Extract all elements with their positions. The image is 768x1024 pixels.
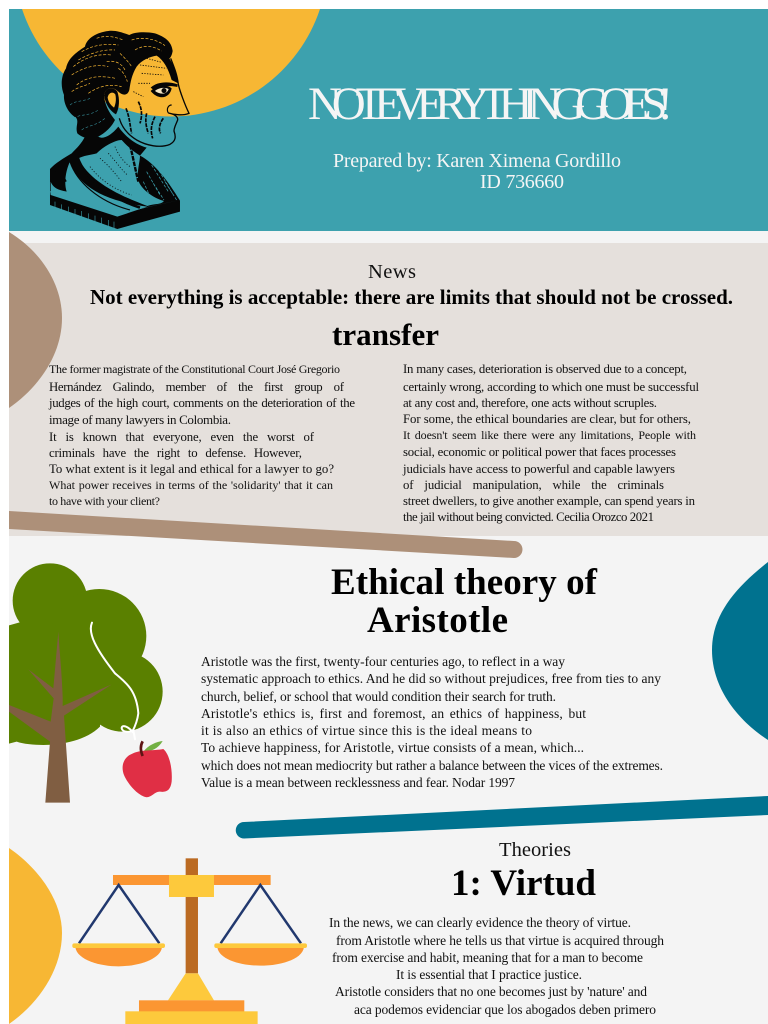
text block: right column: judicials have access to powerful and capable lawyers [402, 462, 675, 476]
robe teal front [51, 162, 147, 217]
teal bar [236, 796, 768, 839]
theory heading: 1: Virtud [451, 863, 596, 904]
icon: tree [9, 563, 163, 803]
text block: Aristotle's ethics: Aristotle's ethics is, first and foremost, an ethics of happiness, but [201, 706, 586, 721]
text block: virtue theory: In the news, we can clearly evidence the theory of virtue. [329, 915, 631, 930]
author line: Prepared by: Karen Ximena Gordillo [333, 150, 621, 172]
panel: ethical theory [9, 562, 768, 839]
text block: Aristotle's ethics: church, belief, or school that would condition their search for truth. [201, 689, 556, 704]
text block: right column [402, 362, 699, 524]
text block: right column: It doesn't seem like there were any limitations, People with [403, 428, 696, 442]
panel: theories [9, 839, 664, 1024]
text block: right column: street dwellers, to give another example, can spend years in [403, 494, 696, 508]
plinth top surface [50, 191, 180, 214]
text block: Aristotle's ethics: it is also an ethics of virtue since this is the ideal means to [201, 723, 532, 738]
brown bar [9, 511, 522, 558]
text block: right column: social, economic or political power that faces processes [403, 445, 676, 459]
text block: left column: criminals have the right to defense. However, [49, 446, 302, 460]
icon: apple [123, 741, 172, 797]
text block: right column: For some, the ethical boundaries are clear, but for others, [403, 412, 691, 426]
text block: Aristotle's ethics [201, 654, 663, 790]
text block: left column: to have with your client? [49, 494, 160, 508]
hair highlights [72, 37, 165, 93]
text block: left column: What power receives in terms of the 'solidarity' that it can [49, 478, 333, 492]
text block: right column: In many cases, deterioration is observed due to a concept, [403, 362, 687, 376]
robe dark left [50, 127, 180, 229]
text block: virtue theory: aca podemos evidenciar que los abogados deben primero [354, 1002, 656, 1017]
sun circle [22, 9, 320, 117]
news subheading: transfer [332, 317, 439, 352]
left yellow shape [9, 848, 62, 1024]
brow and eye [151, 82, 178, 91]
text block: left column: To what extent is it legal and ethical for a lawyer to go? [49, 462, 334, 476]
text block: virtue theory: It is essential that I practice justice. [396, 967, 582, 982]
text block: left column: Hernández Galindo, member of the first group of [49, 380, 345, 394]
news headline: Not everything is acceptable: there are limits that should not be crossed. [90, 285, 733, 309]
author id: ID 736660 [480, 171, 564, 193]
header banner [9, 9, 768, 231]
text block: right column: the jail without being convicted. Cecilia Orozco 2021 [403, 510, 654, 524]
text block: right column: certainly wrong, according to which one must be successful [403, 380, 699, 394]
text block: right column: of judicial manipulation, while the criminals [403, 478, 664, 492]
text block: left column [48, 362, 355, 508]
icon: scales of justice [72, 858, 307, 1024]
text block: left column: image of many lawyers in Colombia. [49, 412, 231, 427]
face outline [119, 58, 189, 146]
string [91, 623, 138, 739]
text block: virtue theory: Aristotle considers that no one becomes just by 'nature' and [335, 984, 647, 999]
panel: news [9, 232, 768, 558]
left brown shape [9, 232, 62, 408]
news label: News [368, 261, 416, 283]
text block: virtue theory: from Aristotle where he tells us that virtue is acquired through [336, 933, 664, 948]
right teal shape [712, 562, 768, 740]
text block: left column: judges of the high court, comments on the deterioration of the [48, 396, 355, 410]
robe texture [55, 145, 140, 210]
text block: Aristotle's ethics: systematic approach to ethics. And he did so without prejudices, free from ties to any [201, 671, 661, 686]
ear [104, 88, 119, 114]
heading: Ethical theory of [331, 562, 598, 603]
text block: virtue theory: from exercise and habit, meaning that for a man to become [332, 950, 643, 965]
text block: Aristotle's ethics: To achieve happiness, for Aristotle, virtue consists of a mean, which... [201, 740, 584, 755]
text block: Aristotle's ethics: Aristotle was the first, twenty-four centuries ago, to reflect in a way [201, 654, 565, 669]
title: NOTEVERYTHINGGOES! [308, 78, 673, 130]
trunk [9, 632, 112, 803]
text block: left column: The former magistrate of the Constitutional Court José Gregorio [49, 362, 340, 376]
text block: Aristotle's ethics: Value is a mean between recklessness and fear. Nodar 1997 [201, 775, 515, 790]
heading line two: Aristotle [367, 600, 508, 641]
text block: left column: It is known that everyone, even the worst of [49, 430, 315, 444]
text block: virtue theory [329, 915, 664, 1017]
hair [62, 31, 178, 138]
theories label: Theories [499, 839, 571, 861]
text block: right column: at any cost and, therefore, one acts without scruples. [403, 396, 657, 410]
icon: Aristotle bust [50, 31, 189, 229]
text block: Aristotle's ethics: which does not mean mediocrity but rather a balance between the vices of the extremes. [201, 758, 663, 773]
